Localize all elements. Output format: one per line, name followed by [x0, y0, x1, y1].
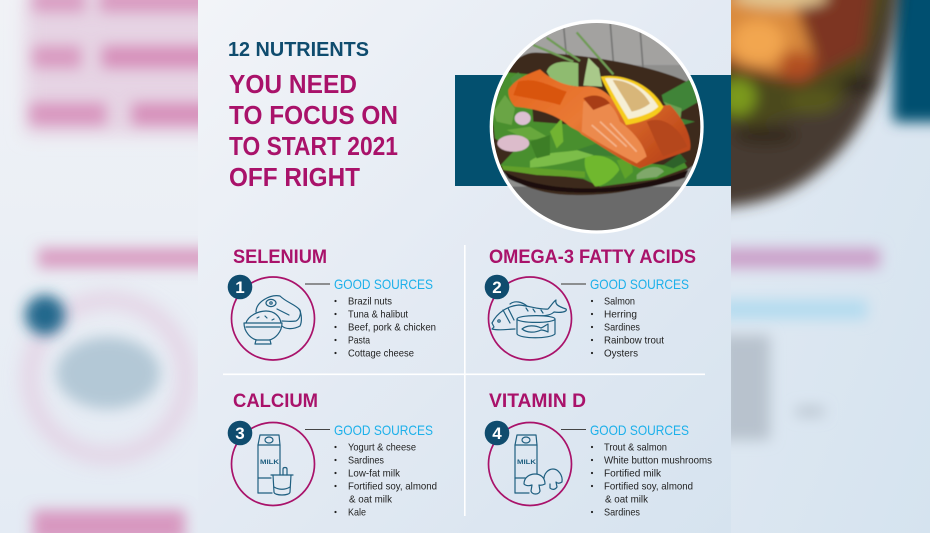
source list: Brazil nuts: [348, 296, 392, 308]
source list: [334, 442, 437, 518]
source list: Tuna & halibut: [348, 308, 408, 320]
connector line: [305, 283, 330, 285]
source list: Rainbow trout: [604, 334, 664, 346]
source list: Fortified milk: [604, 468, 662, 480]
source list: Salmon: [604, 296, 635, 308]
subheading: good sources: GOOD SOURCES: [590, 422, 689, 438]
icon: milk carton and yogurt: MILK: [260, 459, 279, 466]
source list: & oat milk: [349, 494, 393, 506]
source list: Yogurt & cheese: [348, 442, 416, 454]
blurred subheading: [720, 300, 867, 319]
divider: vertical: [464, 245, 466, 516]
blurred photo: [700, 0, 900, 208]
number badge 1: 1: [235, 278, 245, 297]
central infographic panel: [198, 0, 731, 533]
source list: Low-fat milk: [348, 468, 401, 480]
blurred left background: [0, 0, 217, 533]
number badge 4: [485, 421, 509, 445]
connector line: [561, 283, 586, 285]
title: you need to focus on: TO FOCUS ON: [229, 102, 398, 130]
source list: Pasta: [348, 334, 370, 346]
number badge 3: [228, 421, 252, 445]
source list: [334, 296, 436, 360]
number badge 3: 3: [235, 424, 245, 443]
icon: milk carton and mushrooms: [515, 435, 562, 494]
title: you need to focus on: TO START 2021: [229, 133, 398, 161]
source list: Fortified soy, almond: [604, 480, 693, 492]
source list: & oat milk: [605, 494, 649, 506]
source list: [591, 296, 664, 360]
greens: [492, 72, 687, 187]
number badge 2: [485, 275, 509, 299]
blurred right background: [731, 0, 930, 533]
source list: Cottage cheese: [348, 348, 414, 360]
panel 1: selenium: [228, 247, 436, 360]
blurred list: [720, 335, 824, 440]
shallot pieces: [497, 135, 529, 152]
icon: circle frame: [488, 277, 572, 360]
navy band behind photo: [455, 75, 731, 186]
number badge 2: 2: [492, 278, 502, 297]
title: 12 nutrients: 12 NUTRIENTS: [228, 39, 369, 61]
icon: fish and tin: [492, 300, 566, 338]
salmon fillet: [508, 69, 690, 168]
source list: Trout & salmon: [604, 442, 667, 454]
title: you need to focus on: YOU NEED: [229, 71, 357, 99]
heading: omega-3 fatty acids: OMEGA-3 FATTY ACIDS: [489, 247, 696, 268]
connector line: [305, 429, 330, 430]
chive stems: [533, 32, 613, 74]
subheading: good sources: GOOD SOURCES: [590, 276, 689, 292]
source list: [591, 442, 712, 518]
source list: Kale: [348, 506, 366, 518]
lemon slice: [601, 76, 663, 125]
source list: Fortified soy, almond: [348, 480, 437, 492]
connector line: [561, 429, 586, 430]
subheading: good sources: GOOD SOURCES: [334, 276, 433, 292]
plate: [489, 53, 704, 195]
heading: calcium: CALCIUM: [233, 391, 318, 412]
source list: Sardines: [604, 322, 640, 334]
panel 4: vitamin d: [485, 391, 712, 518]
source list: Sardines: [604, 506, 640, 518]
icon: circle frame: [232, 422, 314, 506]
source list: Herring: [604, 308, 637, 320]
source list: Oysters: [604, 348, 638, 360]
number badge 4: 4: [492, 424, 502, 443]
number badge 1: [228, 275, 252, 299]
blurred icon: [56, 337, 160, 409]
soft pink wash behind title: [25, 0, 215, 135]
title: you need to focus on: OFF RIGHT: [229, 164, 360, 192]
icon: steak and bowl of cottage cheese: [244, 296, 301, 344]
blurred navy band: [893, 0, 930, 122]
icon: circle frame: [488, 422, 572, 506]
subheading: good sources: GOOD SOURCES: [334, 422, 433, 438]
source list: White button mushrooms: [604, 454, 712, 466]
icon: milk carton and yogurt: [258, 435, 293, 495]
heading: vitamin d: VITAMIN D: [489, 391, 586, 412]
blurred heading: [720, 248, 880, 268]
heading: selenium: SELENIUM: [233, 247, 327, 268]
photo: salmon on salad: [490, 20, 704, 234]
blurred number badge: [25, 295, 65, 335]
title: you need to focus on: [229, 71, 398, 192]
panel 2: omega-3 fatty acids: [485, 247, 696, 360]
source list: Sardines: [348, 454, 384, 466]
blurred pink ring: [30, 300, 186, 456]
icon: milk carton and mushrooms: MILK: [517, 459, 536, 466]
panel 3: calcium: [228, 391, 437, 518]
divider: horizontal: [223, 374, 705, 375]
source list: Beef, pork & chicken: [348, 322, 436, 334]
icon: circle frame: [232, 277, 314, 360]
blurred title bars: [30, 0, 217, 533]
